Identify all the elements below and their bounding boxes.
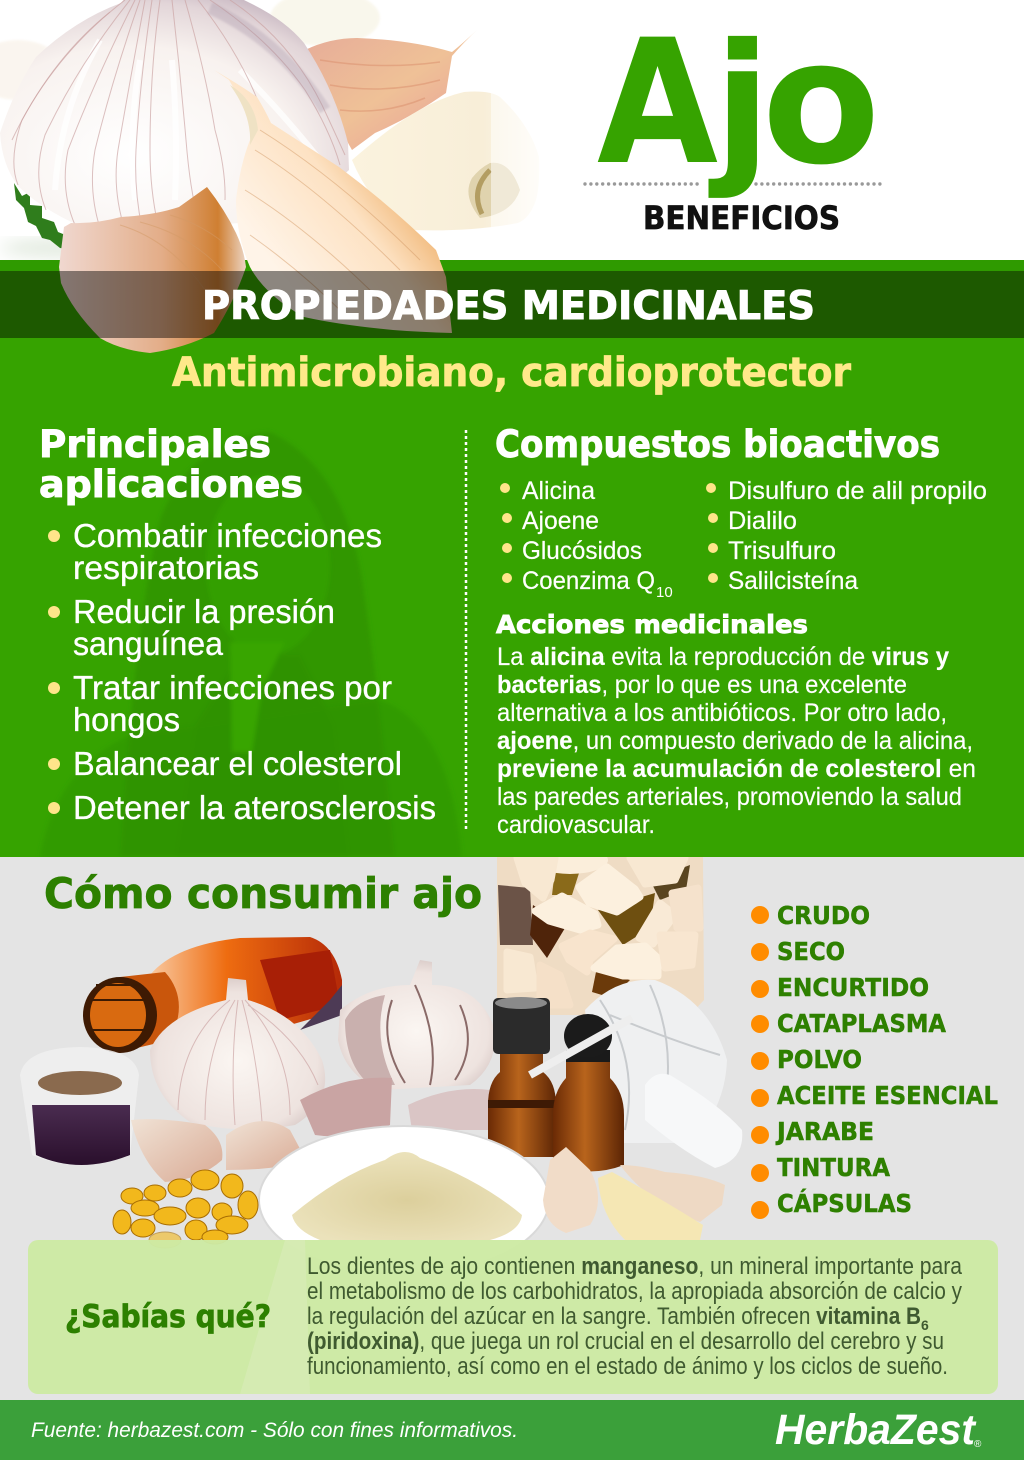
list: compuestos: Alicina — [522, 477, 595, 505]
faint background garlic — [0, 0, 380, 100]
green medicinal panel background — [0, 260, 1024, 857]
list: aplicaciones: Detener la aterosclerosis — [73, 789, 436, 826]
title: Ajo: o — [762, 2, 880, 203]
callout heading: ¿Sabías qué? — [65, 1299, 271, 1335]
heading: principales aplicaciones — [39, 423, 303, 506]
title: Ajo: A — [597, 2, 718, 203]
list: compuestos: Coenzima Q — [522, 567, 655, 595]
list: formas de consumo: CÁPSULAS — [777, 1189, 912, 1218]
heading: principales aplicaciones: aplicaciones — [39, 463, 303, 506]
list: formas de consumo: TINTURA — [777, 1153, 891, 1182]
second dropper bottle — [530, 1014, 632, 1172]
callout text: (piridoxina), que juega un rol crucial en el desarrollo del cerebro y su — [307, 1328, 944, 1355]
loose cloves right — [543, 1147, 725, 1240]
title: Ajo: j — [708, 9, 771, 202]
paragraph: acciones medicinales: cardiovascular. — [497, 811, 655, 839]
logo: HerbaZest: ® — [974, 1439, 982, 1450]
callout text — [307, 1253, 963, 1380]
title band: propiedades medicinales: PROPIEDADES MEDICINALES — [202, 284, 815, 329]
soft shadow under garlic — [0, 238, 140, 258]
white poultice — [585, 980, 742, 1168]
subtitle: Antimicrobiano, cardioprotector — [172, 350, 851, 396]
callout text: 6 — [921, 1317, 929, 1333]
list: compuestos: Dialilo — [728, 507, 797, 535]
list: compuestos — [500, 477, 987, 601]
pink clove — [305, 30, 477, 150]
dotted divider under title — [585, 182, 880, 186]
softgel capsules — [113, 1170, 258, 1248]
list: compuestos: Glucósidos — [522, 537, 642, 565]
big garlic bulb — [0, 0, 349, 230]
title: Ajo — [597, 2, 880, 203]
heading: acciones medicinales: Acciones medicinales — [496, 610, 808, 639]
cup of syrup — [20, 1047, 139, 1165]
logo: HerbaZest: HerbaZest — [775, 1406, 977, 1454]
paragraph: acciones medicinales: ajoene, un compuesto derivado de la alicina, — [497, 727, 973, 755]
large garlic bulb — [150, 978, 325, 1129]
cream clove — [352, 88, 546, 248]
vertical dotted divider — [465, 430, 467, 830]
list: aplicaciones: hongos — [73, 701, 180, 738]
paragraph: acciones medicinales: las paredes arteriales, promoviendo la salud — [497, 783, 962, 811]
paragraph: acciones medicinales: bacterias, por lo que es una excelente — [497, 671, 907, 699]
list: aplicaciones: Balancear el colesterol — [73, 745, 402, 782]
big right clove — [214, 70, 452, 333]
paragraph: acciones medicinales: alternativa a los antibióticos. Por otro lado, — [497, 699, 947, 727]
list: aplicaciones: Reducir la presión — [73, 593, 335, 630]
callout text: la regulación del azúcar en la sangre. También ofrecen vitamina B — [307, 1303, 921, 1330]
list: formas de consumo — [751, 901, 998, 1219]
paragraph: acciones medicinales: previene la acumulación de colesterol en — [497, 755, 976, 783]
heading: compuestos bioactivos: Compuestos bioactivos — [495, 423, 940, 466]
list: aplicaciones: Tratar infecciones por — [73, 669, 392, 706]
list: aplicaciones: sanguínea — [73, 625, 224, 662]
paragraph: acciones medicinales: La alicina evita la reproducción de virus y — [497, 643, 949, 671]
list: compuestos: Salilcisteína — [728, 567, 858, 595]
list: formas de consumo: ENCURTIDO — [777, 973, 929, 1002]
subtitle: beneficios: BENEFICIOS — [643, 199, 840, 237]
list: formas de consumo: ACEITE ESENCIAL — [777, 1081, 998, 1110]
source note: Fuente: herbazest.com - Sólo con fines informativos. — [31, 1419, 518, 1442]
amber bottle on its side — [83, 937, 342, 1053]
gray consumption panel background — [0, 857, 1024, 1400]
list: formas de consumo: JARABE — [775, 1117, 874, 1146]
callout: sabias que — [28, 1240, 998, 1394]
list: formas de consumo: CATAPLASMA — [777, 1009, 947, 1038]
second garlic bulb — [338, 960, 495, 1090]
left clove — [59, 187, 246, 353]
illustration: garlic bulb and cloves, header — [0, 0, 546, 353]
list: compuestos: Trisulfuro — [728, 537, 836, 565]
list: aplicaciones: Combatir infecciones — [73, 517, 382, 554]
list: compuestos: 10 — [656, 584, 673, 601]
list: aplicaciones — [48, 517, 436, 826]
heading: como consumir ajo: Cómo consumir ajo — [44, 869, 482, 918]
bowl of garlic powder — [259, 1126, 549, 1274]
list: aplicaciones: respiratorias — [73, 549, 259, 586]
title band: propiedades medicinales — [0, 271, 1024, 338]
pink garlic cloves — [131, 1078, 490, 1182]
list: formas de consumo: CRUDO — [777, 901, 870, 930]
illustration: garlic products — [20, 846, 742, 1274]
footer — [0, 1400, 1024, 1460]
list: formas de consumo: SECO — [777, 937, 845, 966]
list: compuestos: Disulfuro de alil propilo — [728, 477, 987, 505]
parsley leaf — [14, 183, 72, 250]
paragraph: acciones medicinales — [497, 643, 976, 839]
callout text: Los dientes de ajo contienen manganeso, un mineral importante para — [307, 1253, 963, 1280]
list: compuestos: Ajoene — [522, 507, 599, 535]
list: formas de consumo: POLVO — [777, 1045, 862, 1074]
heading: principales aplicaciones: Principales — [39, 423, 271, 466]
dropper bottles — [488, 997, 556, 1157]
jar of pickled garlic — [497, 846, 704, 1015]
